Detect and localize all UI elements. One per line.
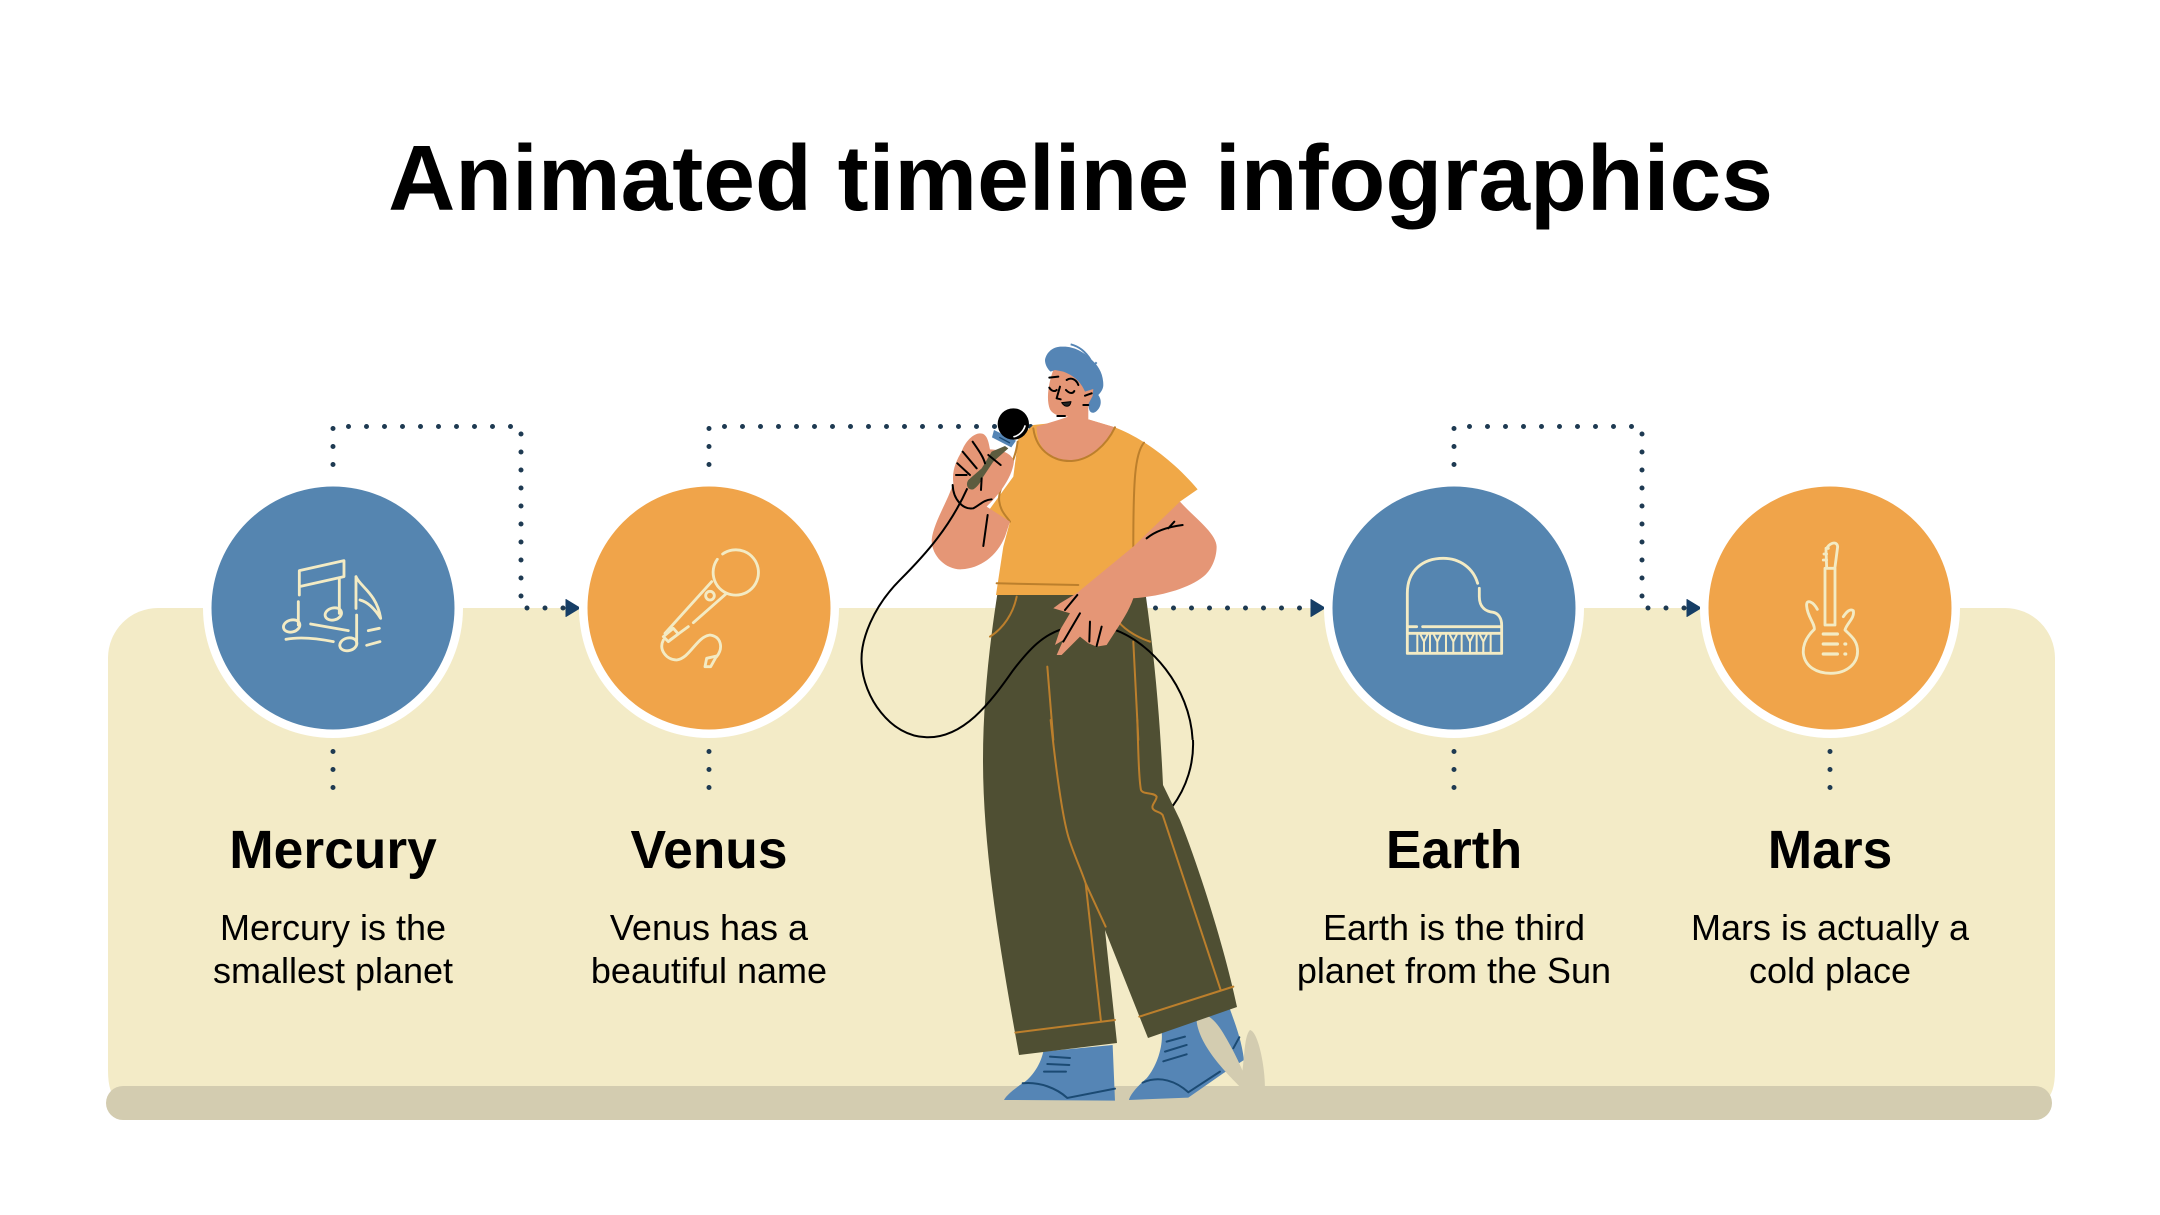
title: Animated timeline infographics [388, 126, 1773, 230]
face lines [1049, 377, 1092, 416]
description: Mars: cold place [1749, 950, 1911, 991]
left arm and hand [932, 433, 1014, 569]
hair [1045, 347, 1103, 413]
shirt seams [997, 427, 1144, 585]
shoes and plant [1004, 1009, 1265, 1101]
description: Mercury: Mercury is the [220, 907, 446, 948]
circle: Mars [1700, 478, 1960, 738]
icon: electric guitar [1803, 543, 1858, 673]
finger lines [953, 442, 1001, 546]
description: Mars: Mars is actually a [1691, 907, 1969, 948]
icon: music notes [282, 561, 381, 653]
heading: Mars: Mars [1768, 821, 1892, 880]
icon: microphone [662, 550, 758, 667]
step: Earth [1297, 478, 1611, 991]
upper body [862, 344, 1217, 740]
microphone highlight [1014, 426, 1025, 437]
connector dots: Venus [706, 752, 712, 788]
connector dots: Mars [1828, 752, 1832, 788]
heading: Earth: Earth [1386, 821, 1522, 880]
floor bar [106, 1086, 2052, 1120]
step: Venus [579, 478, 839, 991]
description: Earth: Earth is the third [1323, 907, 1585, 948]
arrow: Earth to Mars [1454, 426, 1701, 616]
heading: Venus: Venus [630, 821, 788, 880]
stray hair strands [1071, 344, 1097, 367]
step: Mercury [203, 478, 463, 991]
connector dots: Mercury [330, 752, 336, 788]
panel: cream background [108, 608, 2055, 1100]
microphone cable [862, 488, 1193, 740]
arrow: Venus to Earth [709, 426, 1325, 616]
illustration: singer with microphone [862, 344, 1265, 1101]
circle: Venus [579, 478, 839, 738]
description: Earth: planet from the Sun [1297, 950, 1611, 991]
arm and hand lines [1063, 522, 1183, 646]
connector dots: Earth [1452, 752, 1456, 788]
right arm and hand [1053, 502, 1217, 655]
microphone band [992, 430, 1016, 447]
arrow: Mercury to Venus [333, 426, 580, 616]
description: Venus: Venus has a [610, 907, 808, 948]
step: Mars [1691, 478, 1970, 991]
description: Venus: beautiful name [591, 950, 827, 991]
pockets and creases [990, 597, 1150, 740]
trousers [983, 590, 1237, 1055]
neck and face [1037, 363, 1115, 461]
cable behind leg [1172, 740, 1193, 807]
circle: Earth [1324, 478, 1584, 738]
circle: Mercury [203, 478, 463, 738]
description: Mercury: smallest planet [213, 950, 453, 991]
microphone handle [967, 446, 1008, 490]
microphone head [998, 408, 1029, 440]
icon: grand piano [1407, 558, 1502, 653]
microphone band line [999, 437, 1010, 443]
t-shirt [987, 419, 1198, 595]
trouser seams [1015, 720, 1233, 1033]
heading: Mercury: Mercury [229, 821, 437, 880]
